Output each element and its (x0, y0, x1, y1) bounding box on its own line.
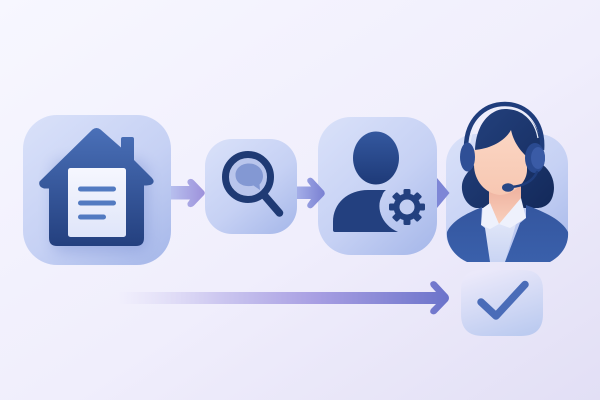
icon: user head (353, 132, 399, 184)
arrow: profile to agent (437, 178, 450, 208)
collar (481, 198, 526, 229)
headband highlight (470, 108, 538, 142)
panel: confirmation (461, 270, 543, 336)
icon: check mark (481, 284, 525, 316)
icon: document (68, 168, 126, 237)
face (474, 130, 527, 195)
document lines (80, 189, 114, 217)
icon: chat bubble (236, 164, 263, 190)
icon: support agent with headset (447, 104, 568, 262)
icon: magnifier lens (229, 158, 267, 196)
headband (466, 104, 542, 150)
panel: agent (446, 134, 568, 262)
arrow: house to search (171, 179, 205, 207)
microphone arm (511, 172, 537, 187)
shirt (484, 224, 516, 262)
icon: gear (389, 189, 425, 225)
ear cup right (525, 143, 545, 173)
hair (462, 109, 554, 208)
icon: house (39, 128, 154, 246)
panel: house with document (23, 115, 171, 265)
jacket (447, 205, 568, 262)
panel: user settings (318, 117, 437, 255)
ear cup left (460, 142, 475, 172)
panel: search (205, 139, 297, 234)
icon: user shoulders (333, 190, 398, 232)
arrow: long arrow to confirmation (118, 281, 449, 314)
icon: magnifier handle (264, 195, 280, 213)
neck (489, 185, 521, 224)
icon shadow (52, 160, 148, 252)
microphone (502, 183, 514, 192)
arrow: search to profile (297, 178, 325, 208)
